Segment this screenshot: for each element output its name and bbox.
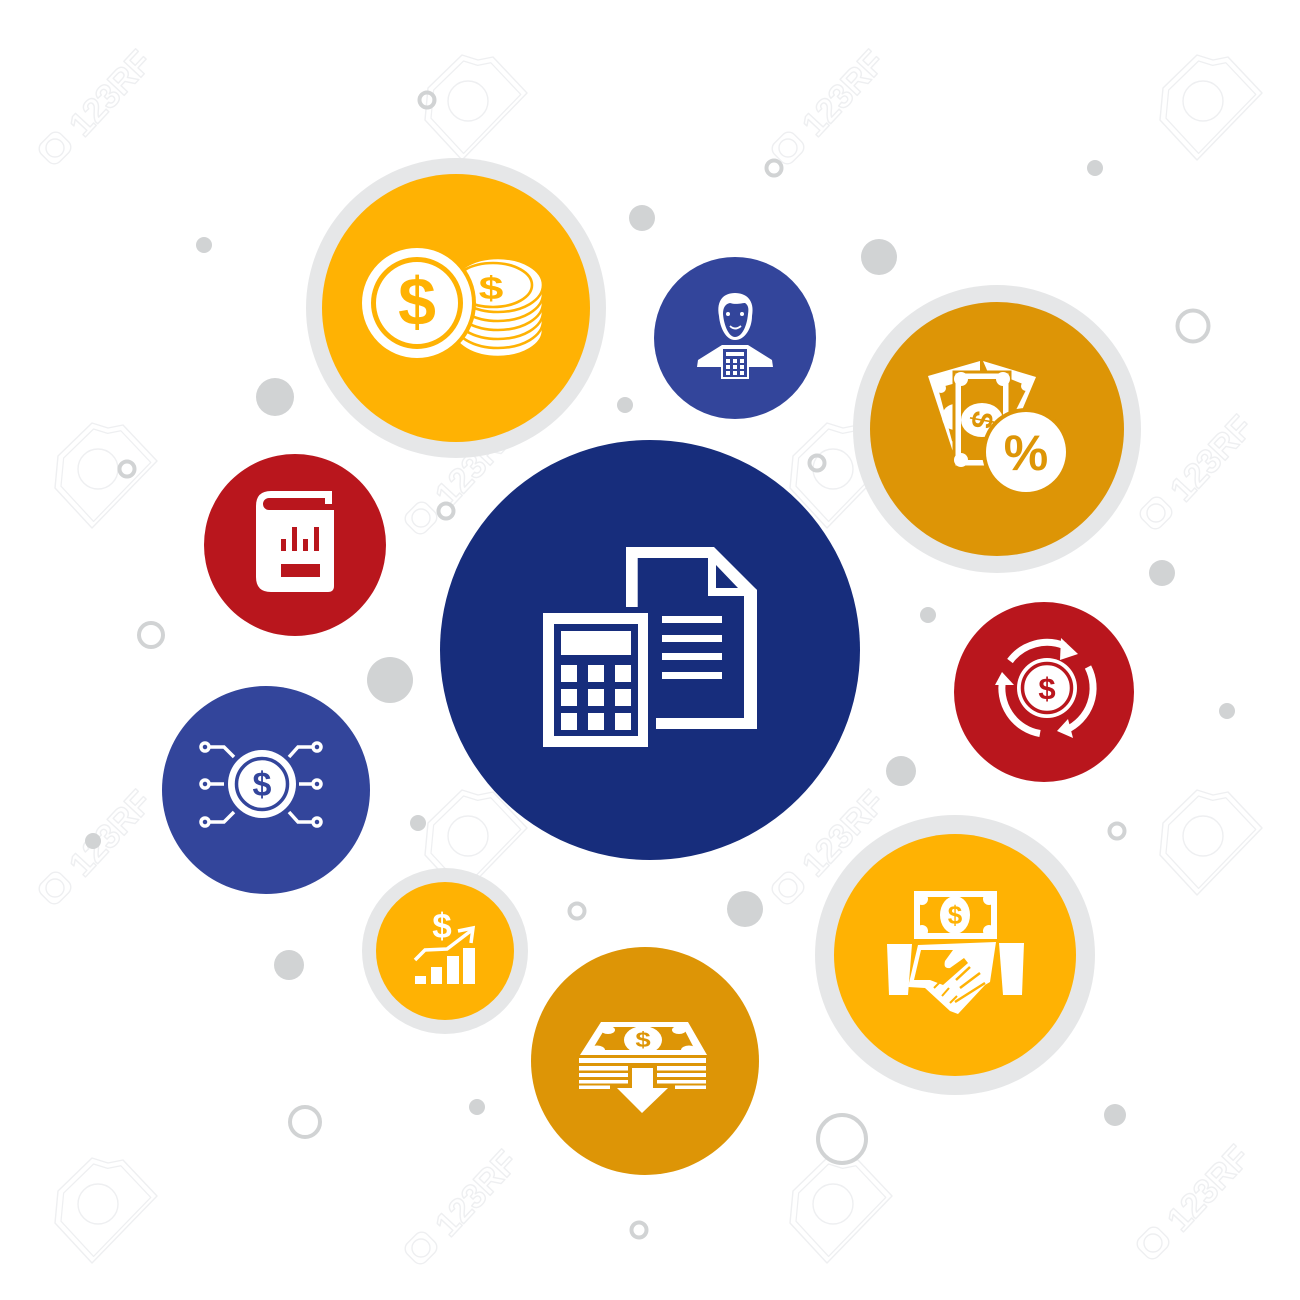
book circle — [204, 454, 386, 636]
watermark stamps: 123RF — [62, 783, 159, 884]
icon: coin stack — [453, 258, 543, 357]
icon: dollar coin: $ — [1038, 671, 1056, 706]
panel: report book — [204, 454, 386, 636]
watermark stamps: 123RF — [795, 43, 892, 144]
watermark stamps: 123RF — [428, 413, 525, 514]
icon: stacked bands — [579, 1058, 706, 1089]
icon: front bill — [954, 372, 1010, 467]
watermark stamps: 123RF — [62, 43, 159, 144]
panel: money stack — [531, 947, 759, 1175]
icon: percent badge: % — [1004, 425, 1048, 481]
icon: dollar coin — [1017, 658, 1077, 718]
icon: connector lines — [201, 743, 321, 826]
coins circle — [322, 174, 590, 442]
icon: banknote — [914, 891, 997, 939]
watermark stamps: 123RF — [1160, 1138, 1257, 1239]
icon: handshake — [887, 942, 1024, 1014]
grey filled dots — [85, 160, 1235, 1126]
icon: front bill: $ — [964, 409, 999, 431]
icon: large coin — [358, 244, 476, 362]
icon: circular arrows — [995, 638, 1093, 738]
panel: accountant — [654, 257, 816, 419]
panel: percent bills — [853, 285, 1141, 573]
watermark stamps: 123RF — [1163, 408, 1260, 509]
network circle — [162, 686, 370, 894]
panel: network — [162, 686, 370, 894]
watermark stamps: 123RF — [795, 783, 892, 884]
icon: book — [256, 491, 334, 592]
percent halo — [853, 285, 1141, 573]
icon: dollar coin — [228, 750, 296, 818]
centre circle — [440, 440, 860, 860]
growth circle — [376, 882, 514, 1020]
icon: calculator — [543, 613, 648, 747]
icon: down arrow — [617, 1068, 668, 1113]
accountant circle — [654, 257, 816, 419]
panel: growth chart — [362, 868, 528, 1034]
icon: percent badge — [982, 408, 1070, 496]
icon: banknote: $ — [948, 900, 963, 930]
growth halo — [362, 868, 528, 1034]
cycle circle — [954, 602, 1134, 782]
icon: growth chart — [415, 907, 475, 984]
icon: large coin: $ — [398, 264, 436, 340]
handshake halo — [815, 815, 1095, 1095]
icon: dollar coin: $ — [253, 766, 272, 804]
icon: growth chart: $ — [432, 907, 452, 946]
panel: handshake — [815, 815, 1095, 1095]
coins halo — [306, 158, 606, 458]
watermark stamps: 123RF — [428, 1143, 525, 1244]
panel: centre calculator and document — [440, 440, 860, 860]
stack dollar sign: $ — [479, 271, 503, 307]
icon: person — [697, 293, 773, 367]
panel: coins — [306, 158, 606, 458]
percent circle — [870, 302, 1124, 556]
panel: money cycle — [954, 602, 1134, 782]
grey outline rings — [120, 92, 1208, 1238]
stack circle — [531, 947, 759, 1175]
icon: small calculator — [722, 348, 748, 378]
handshake circle — [834, 834, 1076, 1076]
icon: banknote — [580, 1022, 707, 1055]
icon: document — [626, 547, 757, 729]
icon: banknote: $ — [635, 1029, 651, 1052]
icon: back bills — [928, 361, 1036, 455]
